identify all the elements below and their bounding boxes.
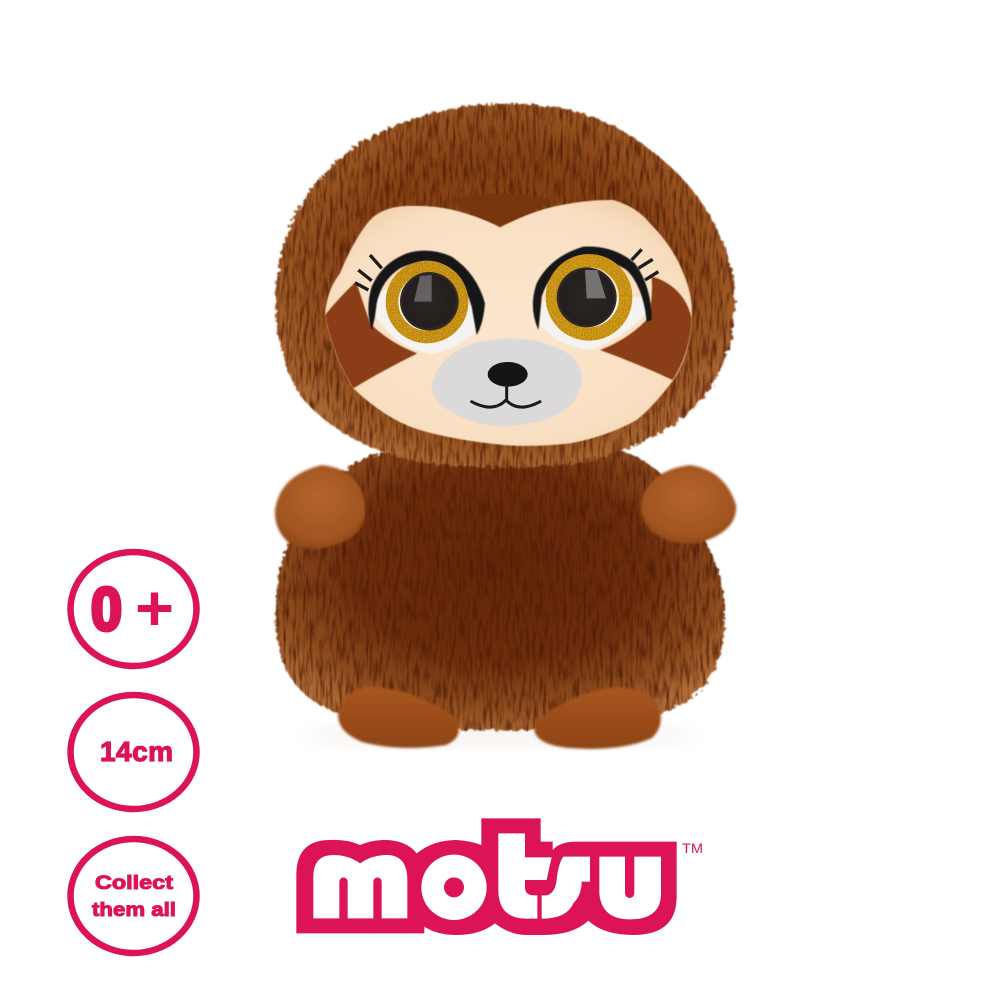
left foot — [338, 686, 459, 748]
left arm — [275, 465, 365, 549]
left eyelashes — [355, 255, 382, 290]
ground shadow — [300, 725, 700, 745]
logo wordmark shape — [296, 818, 677, 935]
right arm — [641, 465, 736, 544]
right foot — [534, 688, 661, 749]
right eye glint — [585, 270, 606, 298]
size text: 14cm — [100, 736, 173, 767]
mouth — [472, 385, 540, 407]
right pupil — [557, 267, 617, 327]
cream face mask — [325, 200, 692, 446]
motsu logo — [296, 818, 703, 935]
badge: collect them all — [70, 839, 196, 953]
left eye white — [375, 290, 477, 354]
head fur — [276, 104, 735, 468]
left eye glint — [414, 275, 432, 302]
left gold ring — [392, 267, 462, 337]
right gold ring — [552, 261, 626, 334]
left brown eye patch — [325, 282, 417, 388]
right eyelashes — [632, 249, 658, 280]
badge: size 14cm — [70, 695, 196, 809]
nose — [488, 362, 528, 387]
left pupil — [400, 272, 459, 331]
forehead tuft — [452, 193, 550, 225]
face — [325, 193, 692, 446]
sloth plush toy — [275, 104, 736, 749]
right brown eye patch — [600, 277, 692, 380]
age plus: + — [135, 572, 174, 644]
plush body — [276, 445, 724, 730]
trademark: TM — [682, 840, 703, 856]
collect text: Collect — [95, 873, 174, 894]
muzzle — [432, 338, 582, 426]
age zero: 0 — [91, 576, 122, 643]
left eye — [355, 251, 485, 354]
badge: age 0+ — [70, 552, 196, 666]
right eye lash band — [533, 247, 652, 330]
right eye — [533, 247, 658, 350]
them all text: them all — [92, 900, 176, 921]
right eye white — [540, 297, 646, 350]
left eye lash band — [368, 251, 485, 335]
